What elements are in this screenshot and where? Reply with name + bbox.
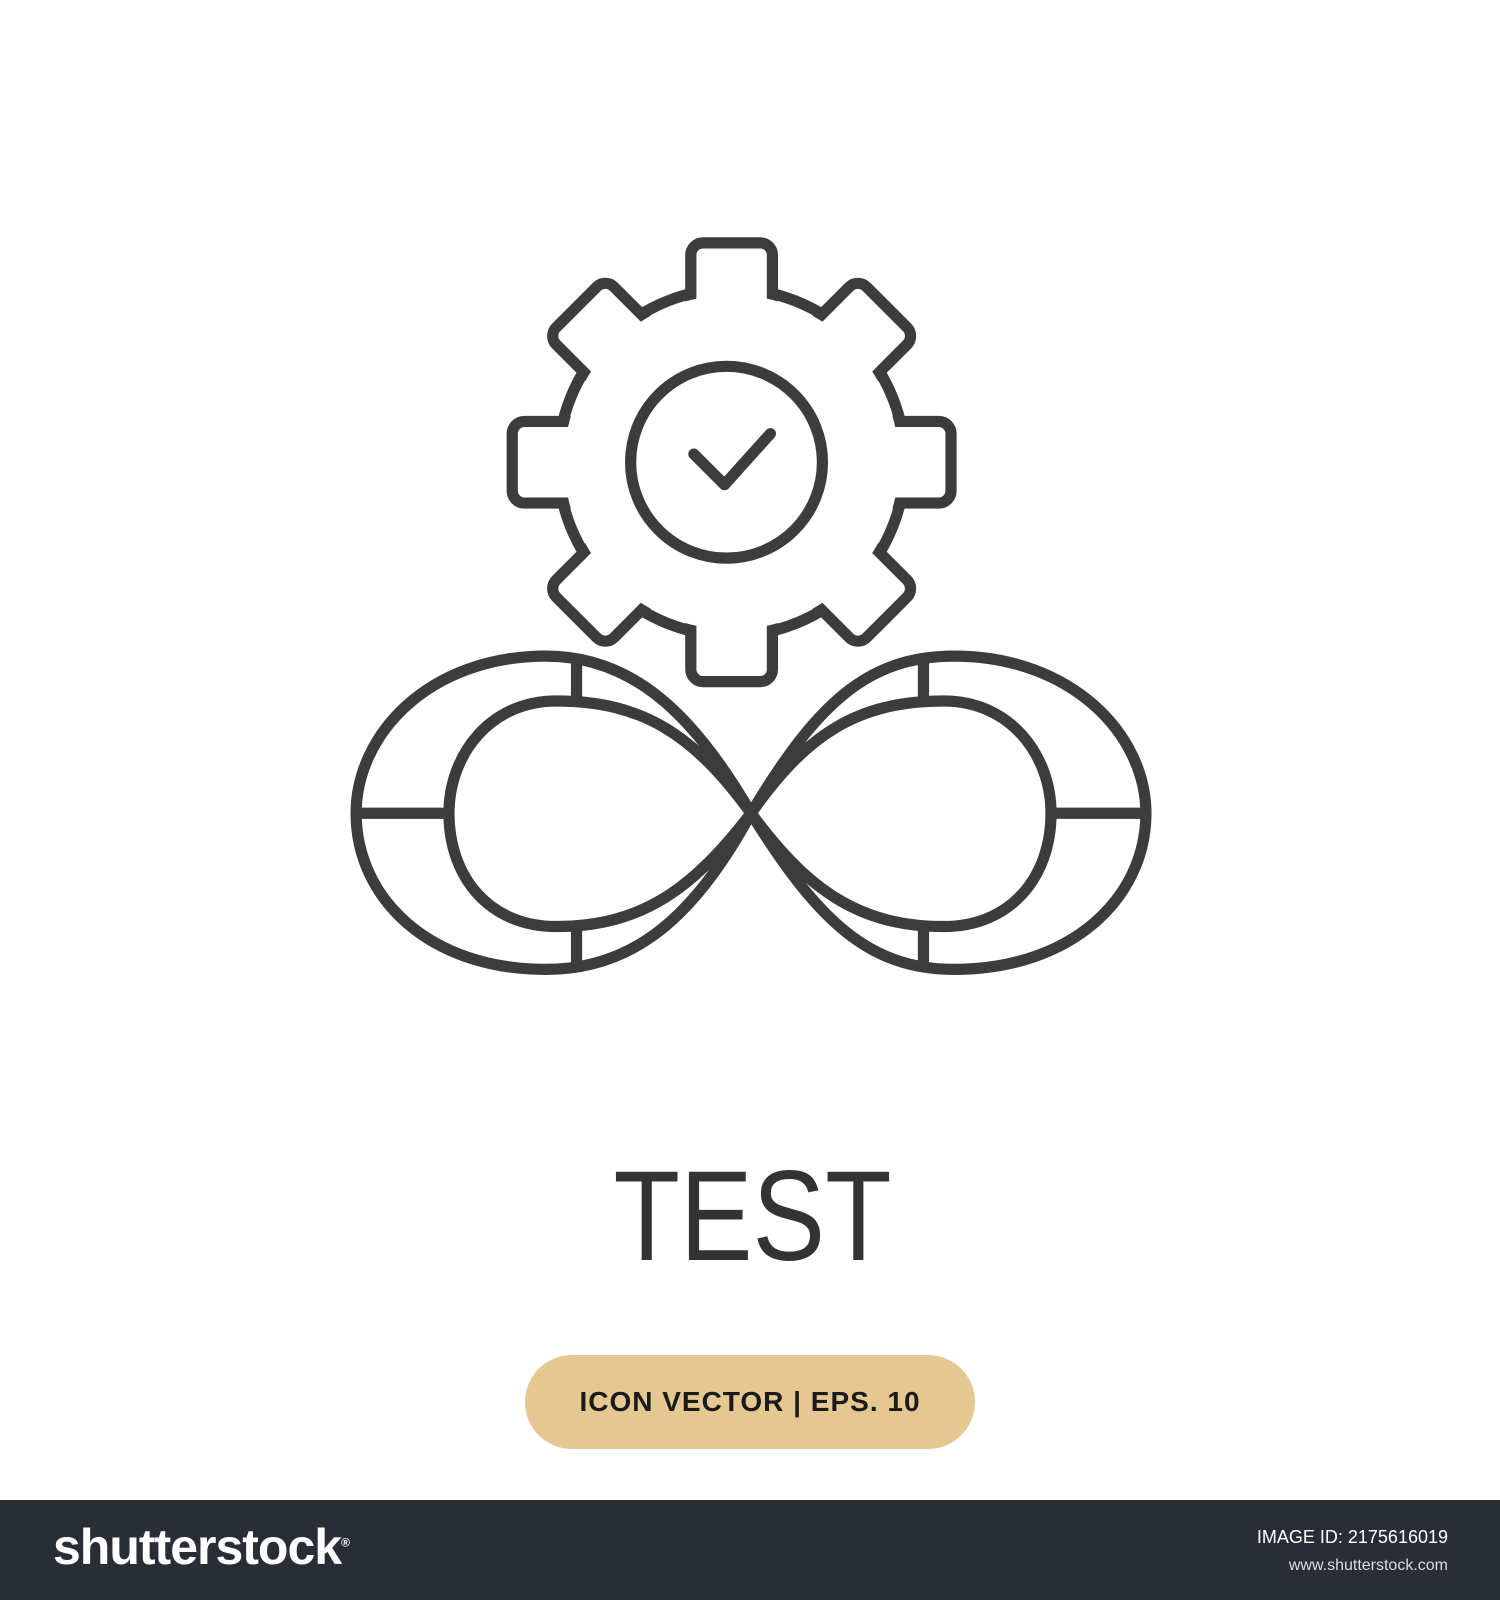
footer bar (0, 1500, 1500, 1600)
title: TEST: TEST (614, 1145, 892, 1288)
badge: icon vector eps 10 (525, 1355, 975, 1449)
icon: infinity (356, 656, 1146, 969)
footer image id: IMAGE ID: 2175616019 (1257, 1527, 1448, 1547)
footer url: www.shutterstock.com (1289, 1557, 1448, 1574)
badge: icon vector eps 10: ICON VECTOR | EPS. 10 (579, 1386, 921, 1417)
footer logo: shutterstock® (53, 1519, 349, 1575)
icon: gear (512, 243, 951, 682)
